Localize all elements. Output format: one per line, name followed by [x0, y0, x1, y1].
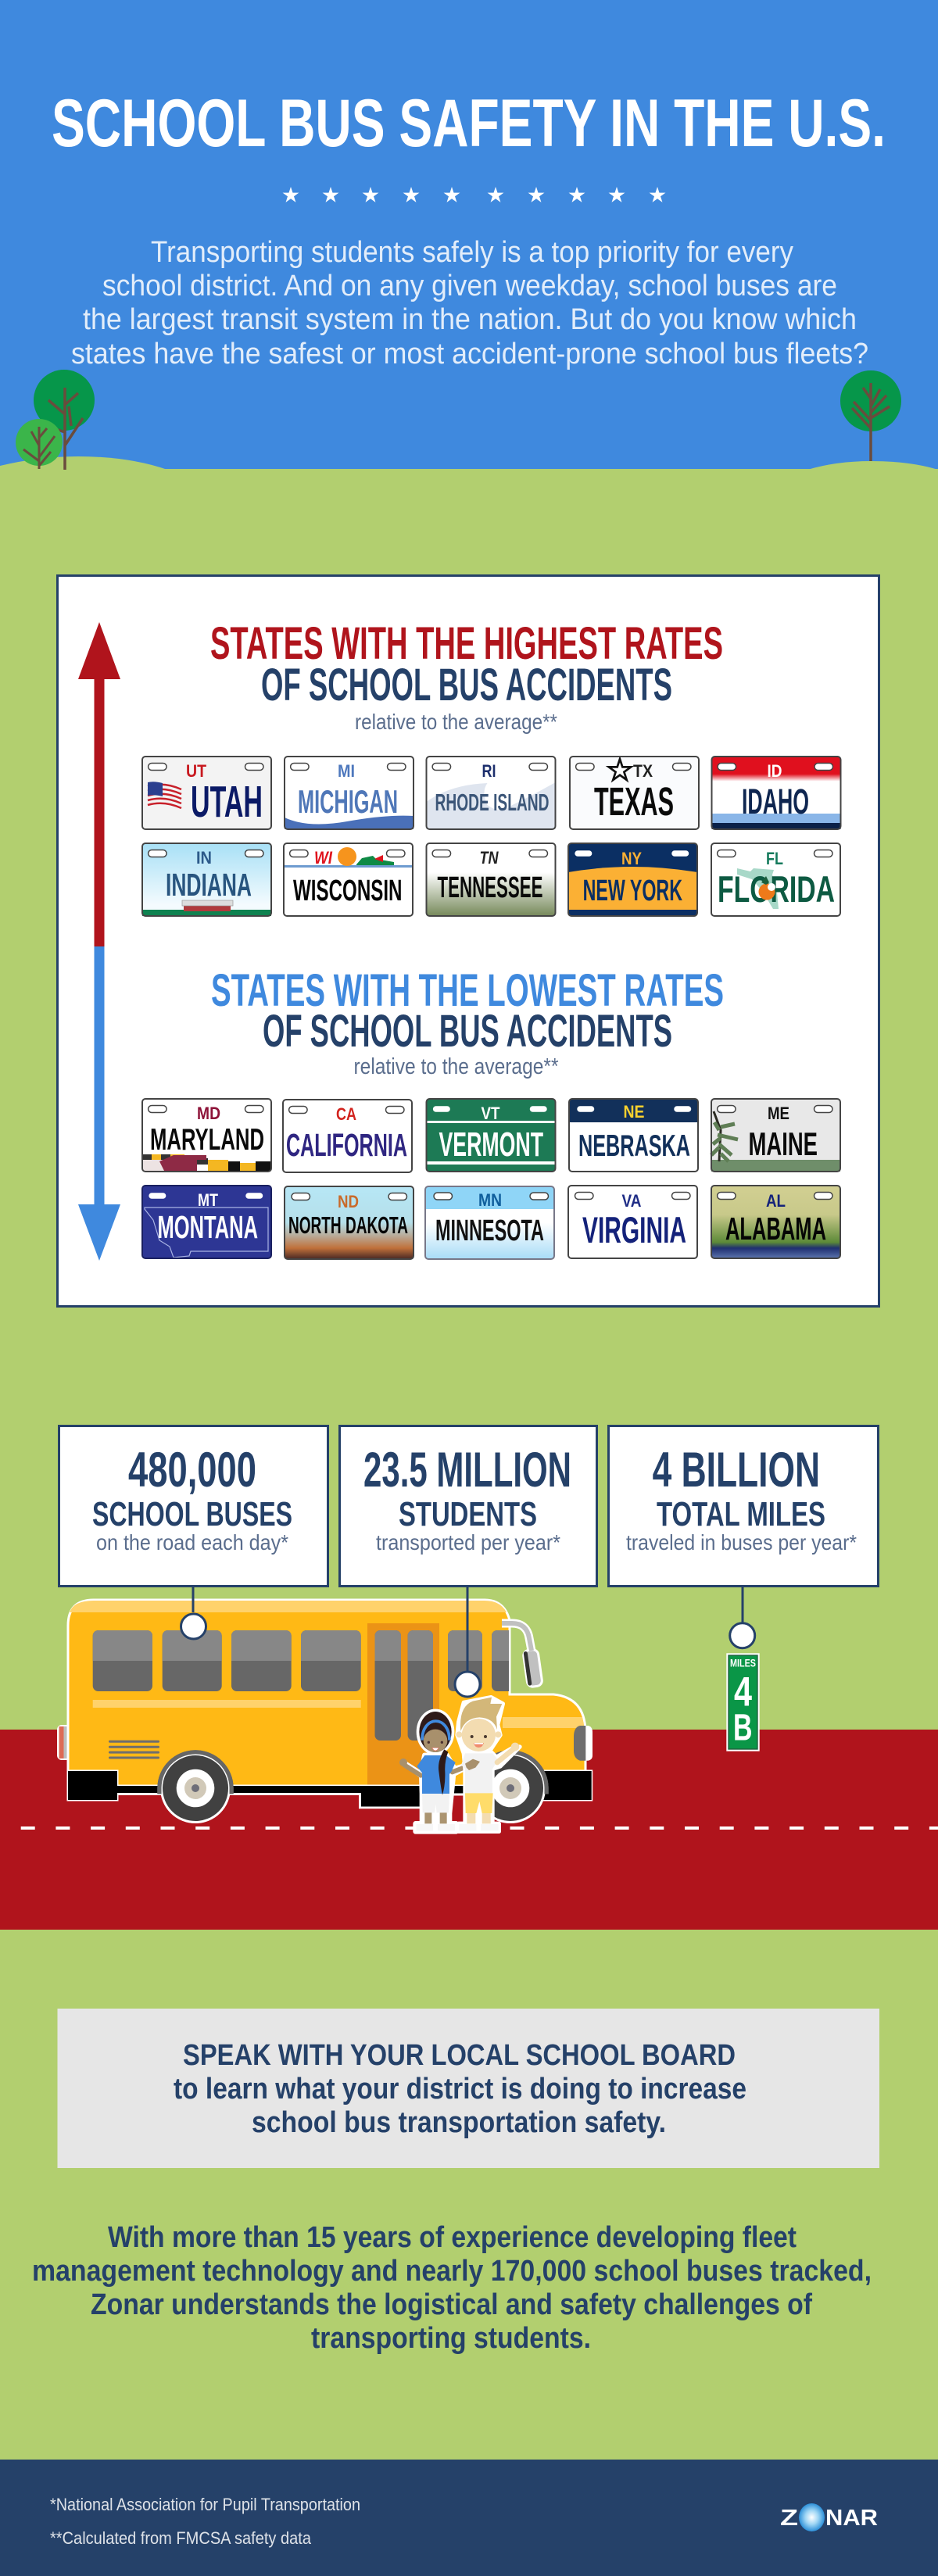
- plate: Wisconsin: WI: [314, 848, 333, 868]
- mirror: [502, 1623, 542, 1687]
- stat box: school buses: 480,000: [128, 1443, 256, 1497]
- text block: about Zonar: transporting students.: [311, 2322, 591, 2355]
- plate: Maine: MAINE: [749, 1125, 818, 1162]
- icon: miles road sign: [727, 1654, 759, 1751]
- subheading: lowest rates: relative to the average**: [353, 1054, 558, 1079]
- row of stars: [283, 187, 665, 202]
- plate: Nebraska: NEBRASKA: [578, 1129, 690, 1163]
- plate: Rhode Island: [427, 757, 555, 829]
- plate: Maryland: MD: [197, 1104, 220, 1123]
- plate: Virginia: VA: [622, 1191, 642, 1211]
- plate: Idaho: [711, 757, 841, 829]
- stat box: total miles: [608, 1426, 879, 1587]
- connector: school buses: [181, 1587, 206, 1639]
- plate: Idaho: IDAHO: [742, 782, 809, 821]
- icon: large tree left: [34, 370, 95, 470]
- plate: Florida: FL: [766, 849, 783, 868]
- icon: tree right: [840, 370, 901, 461]
- plate: Tennessee: TN: [480, 848, 499, 868]
- plate: Florida: FLORIDA: [718, 868, 835, 910]
- plate: Minnesota: MN: [478, 1190, 502, 1210]
- plate: Minnesota: [425, 1186, 554, 1259]
- vents: [109, 1741, 159, 1758]
- plate: Indiana: INDIANA: [166, 867, 252, 903]
- plate: California: CA: [336, 1104, 356, 1124]
- stat box: students: STUDENTS: [399, 1495, 537, 1533]
- plate: Rhode Island: RHODE ISLAND: [435, 789, 549, 816]
- tail light: [57, 1725, 77, 1760]
- panel: accident rates: [58, 575, 879, 1307]
- connector: total miles: [730, 1587, 755, 1648]
- heading: lowest rates: [211, 965, 724, 1057]
- plate: Texas: TX: [633, 761, 653, 781]
- footnotes: *National Association for Pupil Transportation: [50, 2495, 360, 2514]
- plate: Texas: [570, 757, 699, 829]
- intro paragraph: the largest transit system in the nation. But do you know which: [83, 303, 857, 336]
- stat box: school buses: SCHOOL BUSES: [92, 1495, 292, 1533]
- plate: Florida: [711, 843, 840, 916]
- intro paragraph: [71, 236, 868, 370]
- plate: North Dakota: [285, 1186, 414, 1259]
- connector: students: [455, 1587, 480, 1697]
- plate: Virginia: [568, 1186, 697, 1258]
- plate: Montana: MT: [198, 1190, 218, 1210]
- plate: Vermont: VT: [482, 1104, 500, 1123]
- plate: Texas: TEXAS: [594, 779, 674, 824]
- illustration: school bus: [57, 1600, 593, 1823]
- plate: Utah: UT: [186, 761, 206, 781]
- callout: speak with your school board: to learn what your district is doing to increase: [174, 2073, 746, 2106]
- text block: about Zonar: [32, 2221, 872, 2355]
- footer band: [0, 2460, 938, 2576]
- plate: Maine: [711, 1099, 840, 1172]
- plate: Wisconsin: WISCONSIN: [293, 875, 402, 907]
- plate: Maine: ME: [768, 1104, 789, 1123]
- plate: Michigan: [285, 757, 414, 829]
- rear wheel: [157, 1750, 234, 1823]
- arrow: lowest rates down: [78, 946, 120, 1261]
- plate: Indiana: IN: [196, 848, 212, 868]
- plate: California: [283, 1100, 412, 1172]
- plate: Idaho: ID: [768, 761, 782, 781]
- plate: Nebraska: NE: [624, 1102, 644, 1122]
- stat box: school buses: [59, 1426, 328, 1587]
- girl's hand on boy: [465, 1759, 480, 1770]
- text block: about Zonar: With more than 15 years of experience developing fleet: [108, 2221, 797, 2254]
- icon: small tree left: [16, 419, 63, 469]
- footnotes: [50, 2495, 360, 2548]
- stat box: students: [339, 1426, 597, 1587]
- plate: Michigan: MI: [338, 761, 355, 781]
- plate: Montana: [142, 1186, 271, 1258]
- girl: [399, 1712, 475, 1831]
- plate: Vermont: VERMONT: [439, 1125, 543, 1164]
- plate: Nebraska: [569, 1099, 698, 1172]
- plate: Virginia: VIRGINIA: [582, 1209, 686, 1250]
- logo: Zonar: Z: [780, 2506, 798, 2531]
- plate: Maryland: [142, 1099, 271, 1172]
- callout: speak with your school board: school bus transportation safety.: [252, 2106, 666, 2139]
- plate: California: CALIFORNIA: [286, 1127, 407, 1163]
- stat box: students: transported per year*: [376, 1530, 560, 1555]
- plate: Maryland: MARYLAND: [150, 1123, 264, 1157]
- background: sky: [0, 0, 938, 470]
- callout: speak with your school board: SPEAK WITH YOUR LOCAL SCHOOL BOARD: [183, 2039, 736, 2072]
- headlight: [574, 1726, 593, 1761]
- stat box: total miles: traveled in buses per year*: [626, 1530, 857, 1555]
- plate: North Dakota: NORTH DAKOTA: [288, 1211, 408, 1239]
- door: [367, 1623, 439, 1786]
- plate: Montana: MONTANA: [158, 1209, 258, 1245]
- plate: Indiana: [142, 843, 271, 916]
- boy: [456, 1698, 520, 1831]
- callout: speak with your school board: [58, 2009, 879, 2168]
- icon: miles road sign: 4: [734, 1669, 752, 1716]
- stat box: total miles: 4 BILLION: [653, 1443, 820, 1497]
- intro paragraph: Transporting students safely is a top priority for every: [151, 236, 793, 269]
- stat box: total miles: TOTAL MILES: [657, 1495, 825, 1533]
- plate: Utah: [142, 757, 271, 829]
- plate: New York: [568, 843, 697, 916]
- arrow: highest rates up: [78, 622, 120, 946]
- plate: Tennessee: [427, 843, 555, 916]
- icon: miles road sign: MILES: [730, 1657, 756, 1669]
- plate: Tennessee: TENNESSEE: [438, 871, 542, 904]
- heading: highest rates: OF SCHOOL BUS ACCIDENTS: [261, 660, 672, 710]
- road: [0, 1730, 938, 1930]
- plate: Wisconsin: [284, 843, 413, 916]
- stat box: school buses: on the road each day*: [96, 1530, 288, 1555]
- side stripe: [93, 1700, 361, 1708]
- background: grass: [0, 456, 938, 2460]
- chassis: [68, 1771, 592, 1800]
- front wheel: [472, 1750, 549, 1823]
- subheading: highest rates: relative to the average**: [355, 710, 557, 734]
- plate: New York: NY: [621, 849, 642, 868]
- heading: highest rates: [210, 618, 723, 710]
- plate: North Dakota: ND: [338, 1192, 359, 1211]
- plate: Alabama: [711, 1186, 840, 1258]
- plate: Michigan: MICHIGAN: [298, 783, 398, 820]
- plate: Rhode Island: RI: [482, 761, 496, 781]
- text block: about Zonar: Zonar understands the logistical and safety challenges of: [91, 2288, 812, 2321]
- plate: New York: NEW YORK: [583, 875, 682, 907]
- illustration: children: [399, 1698, 520, 1831]
- plate: Minnesota: MINNESOTA: [435, 1215, 544, 1247]
- intro paragraph: school district. And on any given weekday, school buses are: [102, 270, 837, 302]
- plate: Alabama: AL: [766, 1191, 786, 1211]
- intro paragraph: states have the safest or most accident-prone school bus fleets?: [71, 338, 868, 370]
- footnotes: **Calculated from FMCSA safety data: [50, 2528, 312, 2548]
- plate: Utah: UTAH: [191, 777, 263, 827]
- heading: lowest rates: OF SCHOOL BUS ACCIDENTS: [263, 1006, 672, 1057]
- logo: Zonar: NAR: [825, 2506, 878, 2531]
- icon: miles road sign: B: [733, 1708, 752, 1749]
- logo: Zonar: [780, 2503, 878, 2531]
- windows: [93, 1630, 509, 1741]
- stat box: students: 23.5 MILLION: [363, 1443, 571, 1497]
- bus body: [68, 1600, 585, 1786]
- plate: Vermont: [427, 1099, 555, 1172]
- plate: Alabama: ALABAMA: [725, 1211, 826, 1247]
